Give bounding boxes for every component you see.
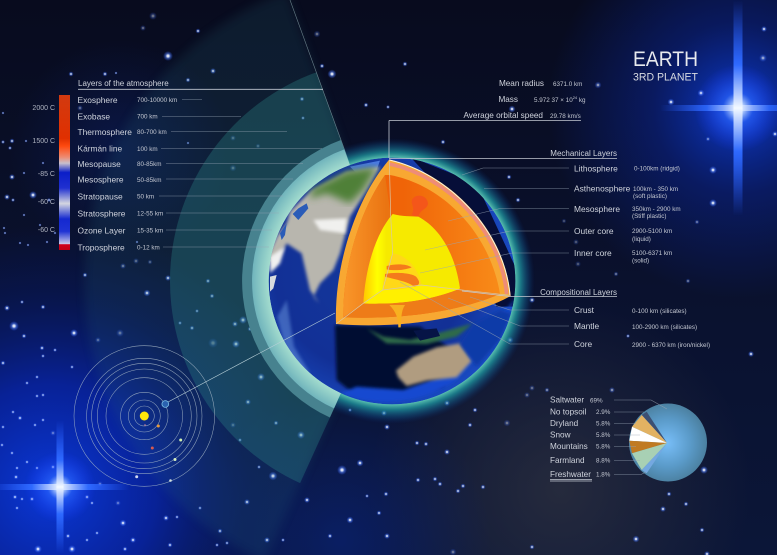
planet facts: Mean radius xyxy=(499,79,544,88)
layers of the atmosphere: 12-55 km xyxy=(137,210,163,218)
mechanical layers: Mechanical Layers xyxy=(550,149,617,158)
layers of the atmosphere: Troposphere xyxy=(78,242,125,252)
layers of the atmosphere: 0-12 km xyxy=(137,244,160,252)
outer core xyxy=(363,214,460,304)
temperature scale bar xyxy=(32,95,70,250)
bright lower rim xyxy=(340,297,517,402)
sun xyxy=(140,412,149,420)
title: EARTH xyxy=(633,48,698,71)
Earth marker xyxy=(162,401,169,407)
Earth globe with cut-away xyxy=(268,157,518,404)
layers of the atmosphere: Kármán line xyxy=(78,144,123,154)
pie labels: 1.8% xyxy=(596,472,611,478)
atmosphere sector xyxy=(170,0,392,483)
mechanical layers: 350km - 2900 km xyxy=(632,206,681,213)
planet facts: 29.78 km/s xyxy=(550,113,581,120)
compositional layers: Crust xyxy=(574,305,595,315)
mechanical layers: Outer core xyxy=(574,226,614,236)
layers of the atmosphere: Stratosphere xyxy=(78,208,126,218)
mechanical layers: (solid) xyxy=(632,258,649,264)
pie labels: Dryland xyxy=(550,419,579,428)
pie labels: 5.8% xyxy=(596,420,611,428)
mechanical layers: (Stiff plastic) xyxy=(632,213,667,220)
top sliver of land xyxy=(350,160,380,172)
layers of the atmosphere: 50-85km xyxy=(137,177,162,184)
temperature scale bar: -60 C xyxy=(38,199,55,206)
wedge rim xyxy=(336,159,511,325)
mechanical layers: 2900-5100 km xyxy=(632,228,672,235)
pie labels: No topsoil xyxy=(550,408,587,416)
mechanical layers: 100km - 350 km xyxy=(633,186,678,193)
compositional layers xyxy=(400,282,710,349)
dark night ocean xyxy=(335,325,457,397)
planet facts: Average orbital speed xyxy=(463,111,543,120)
wedge seam lines xyxy=(336,159,511,324)
dark right limb xyxy=(410,157,518,307)
layers of the atmosphere: Ozone Layer xyxy=(78,226,126,236)
layers of the atmosphere: 80-700 km xyxy=(137,129,167,136)
outer core lower face xyxy=(363,285,460,304)
pie labels: 2.9% xyxy=(596,409,611,416)
layers of the atmosphere: 100 km xyxy=(137,146,158,153)
planet facts: 6371.0 km xyxy=(553,81,582,88)
compositional layers: Compositional Layers xyxy=(540,288,617,297)
compositional layers: 2900 - 6370 km (iron/nickel) xyxy=(632,342,710,349)
compositional layers: 0-100 km (silicates) xyxy=(632,308,687,315)
pie labels: 5.8% xyxy=(596,444,611,450)
ocean cloud streaks xyxy=(277,300,310,373)
layers of the atmosphere: Layers of the atmosphere xyxy=(78,79,169,88)
pie labels: 5.8% xyxy=(596,432,611,439)
pie labels: Farmland xyxy=(550,456,585,465)
land use pie chart xyxy=(550,396,707,482)
mantle left face xyxy=(343,175,391,317)
bright star top right xyxy=(660,0,777,216)
glow around Earth xyxy=(249,138,535,424)
mechanical layers: Lithosphere xyxy=(574,164,618,174)
title: 3RD PLANET xyxy=(633,72,698,84)
compositional layers: Mantle xyxy=(574,321,599,331)
temperature scale bar: -60 C xyxy=(38,227,55,234)
faint outer atmosphere fan xyxy=(84,0,392,555)
title xyxy=(633,48,698,84)
mechanical layers: 0-100km (ridgid) xyxy=(634,166,680,172)
pie labels: Saltwater xyxy=(550,396,584,404)
mechanical layers: (soft plastic) xyxy=(633,193,667,200)
mantle plume xyxy=(412,196,428,217)
layers of the atmosphere: 50 km xyxy=(137,194,154,200)
pie labels xyxy=(550,396,667,481)
inner core xyxy=(383,253,422,290)
pie labels: 8.8% xyxy=(596,458,611,464)
atmosphere rings xyxy=(242,140,392,418)
pie labels: Snow xyxy=(550,430,571,440)
core drip xyxy=(389,305,405,327)
layers of the atmosphere: 15-35 km xyxy=(137,228,163,234)
mechanical layers: (liquid) xyxy=(632,236,651,243)
compositional layers: 100-2900 km (silicates) xyxy=(632,324,697,331)
layers of the atmosphere: Exosphere xyxy=(78,95,118,105)
mechanical layers xyxy=(389,149,681,273)
mechanical layers: 5100-6371 km xyxy=(632,250,672,257)
layers of the atmosphere: Thermosphere xyxy=(78,127,132,137)
layers of the atmosphere: 700 km xyxy=(137,114,158,120)
Asia xyxy=(268,167,380,303)
layers of the atmosphere: 700-10000 km xyxy=(137,97,177,104)
layers of the atmosphere: Mesosphere xyxy=(78,174,124,184)
temperature scale bar: 1500 C xyxy=(32,138,55,145)
planet facts: Mass xyxy=(498,95,518,104)
solar system diagram xyxy=(74,313,335,486)
Australia xyxy=(396,343,472,386)
temperature scale bar: -85 C xyxy=(38,171,55,178)
mantle xyxy=(343,175,500,318)
temperature scale bar: 2000 C xyxy=(32,105,55,112)
globe surface xyxy=(268,157,518,404)
layers of the atmosphere xyxy=(78,79,323,252)
pie labels: 69% xyxy=(590,398,603,404)
planet facts: kg xyxy=(577,97,586,104)
compositional layers: Core xyxy=(574,339,592,349)
inner core streaks xyxy=(385,264,419,287)
layers of the atmosphere: 80-85km xyxy=(137,161,162,168)
south-east ocean xyxy=(460,310,512,367)
layers of the atmosphere: Mesopause xyxy=(78,159,121,169)
mechanical layers: Inner core xyxy=(574,248,612,258)
layers of the atmosphere: Exobase xyxy=(78,112,110,122)
Indonesia xyxy=(367,323,473,344)
planet facts: 24 xyxy=(573,95,578,100)
planet facts xyxy=(389,79,586,158)
pink crust band xyxy=(389,164,507,294)
planet facts: 5.972 37 × 10 xyxy=(534,97,573,104)
mechanical layers: Asthenosphere xyxy=(574,184,631,194)
mechanical layers: Mesosphere xyxy=(574,204,620,214)
layers of the atmosphere: Stratopause xyxy=(78,192,123,202)
pie labels: Mountains xyxy=(550,442,588,451)
bright star bottom left xyxy=(0,420,130,554)
mantle bottom face xyxy=(343,289,500,318)
pie labels: Freshwater xyxy=(550,470,591,479)
